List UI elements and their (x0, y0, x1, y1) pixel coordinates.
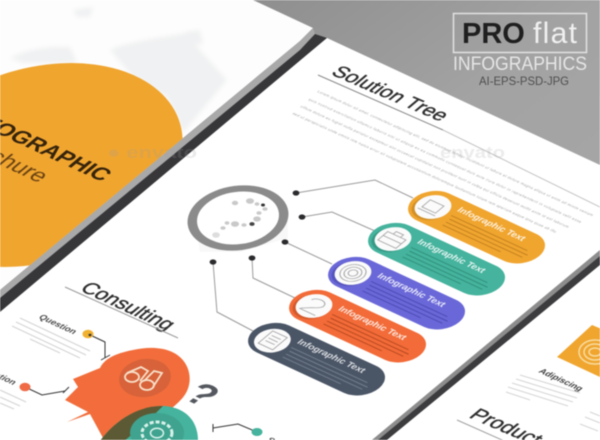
label: Infographic Text (295, 337, 369, 375)
formats: AI-EPS-PSD-JPG (479, 74, 569, 88)
connector: red dot to head (20, 383, 69, 395)
flat: flat (533, 17, 578, 50)
connector: teal dot (213, 424, 262, 436)
pill: dark slate (238, 317, 395, 402)
connector: yellow dot to head (82, 330, 110, 360)
panel: brochure cover page (0, 0, 327, 312)
text block: intro paragraph: Lorem ipsum dolor sit amet, consectetur adipiscing elit, sed do eiusmod tempor incididunt ut labore et dolore magna aliqua ut enim ad minim veniam (316, 89, 595, 217)
heading: Consulting: Consulting (75, 278, 181, 334)
panel: product page (387, 265, 600, 440)
pill: orange (279, 284, 436, 369)
head: teal profile (100, 406, 198, 440)
label: Adipiscing: Adipiscing (536, 367, 586, 393)
text block: intro paragraph: cillum dolore eu fugiat nulla pariatur excepteur sint occaecat cupidatat non proident sunt in culpa qui officia deserunt mollit anim id est laborum (299, 104, 571, 229)
pill: yellow (398, 185, 555, 270)
icon: document (258, 331, 287, 350)
label: Question top: Question (36, 313, 79, 336)
orange circle (0, 62, 184, 268)
head overlap (100, 406, 163, 440)
icon: question mark: ? (175, 377, 228, 414)
label: Infographic Text (336, 304, 410, 342)
head: orange profile (65, 348, 190, 440)
icon: target (335, 261, 371, 285)
title badge (453, 14, 587, 88)
text block: intro paragraph: quis nostrud exercitation ullamco laboris nisi ut aliquip ex ea commodo consequat duis aute irure dolor in reprehenderit in voluptate velit esse (307, 97, 583, 224)
icon: dotted question mark (212, 198, 268, 238)
icon: gear (130, 413, 184, 440)
icon: binoculars (117, 356, 173, 400)
watermark: envato left: ● envato (107, 143, 197, 162)
pill: purple (318, 251, 475, 336)
heading: Solution Tree: Solution Tree (326, 62, 454, 125)
icon: number two (300, 297, 329, 316)
text block: adipiscing notes (506, 375, 580, 406)
icon: yellow tile with spiral (557, 325, 600, 377)
text block: question top notes (12, 318, 90, 358)
text block: question left notes (0, 390, 26, 409)
icon: monitor (418, 199, 446, 216)
text block: intro paragraph: sed ut perspiciatis unde omnis iste natus error sit voluptatem accusantium doloremque laudantium totam rem aperiam eaque ipsa quae ab illo (291, 111, 558, 234)
connector lines (213, 180, 413, 331)
watermark: envato right: envato (440, 143, 505, 162)
label: Infographic Text (415, 237, 489, 275)
connector dots (210, 190, 305, 265)
pill: teal (358, 217, 515, 302)
INFOGRAPHICS: INFOGRAPHICS (453, 53, 587, 75)
PRO: PRO (462, 18, 525, 50)
ring with question mark dots (174, 177, 302, 259)
badge box (454, 14, 586, 52)
icon: briefcase (378, 229, 409, 248)
world map background (10, 7, 227, 133)
text block: second notes (580, 412, 600, 431)
label: Infographic Text (375, 271, 449, 309)
label: Infographic Text (455, 205, 529, 243)
panel: consulting section (0, 278, 305, 440)
page edge band (372, 250, 600, 440)
